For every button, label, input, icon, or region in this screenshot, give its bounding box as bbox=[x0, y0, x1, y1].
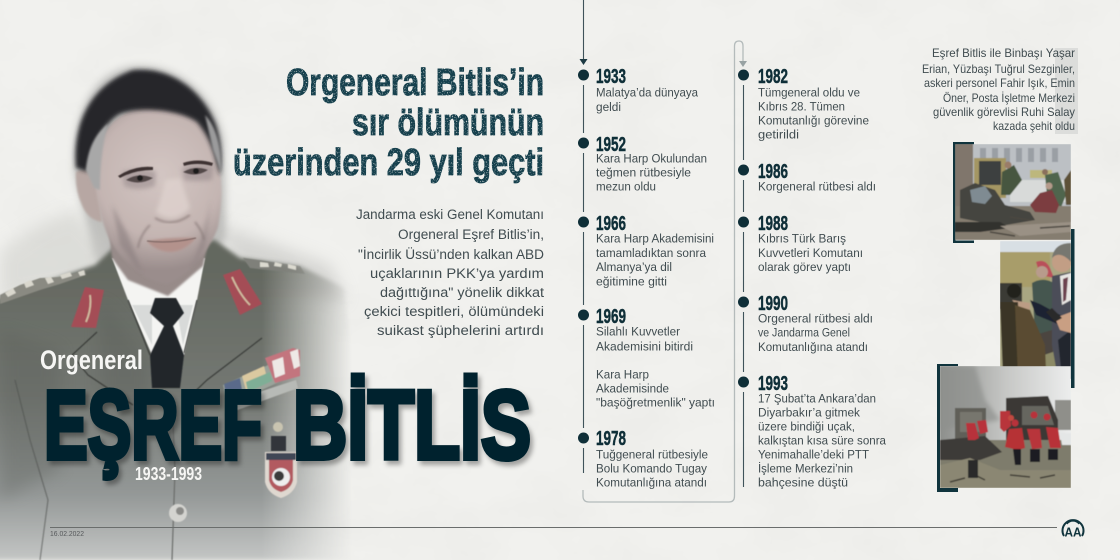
1988: 1988 bbox=[758, 213, 788, 235]
photo: rescue workers in red bbox=[940, 366, 1071, 488]
1966 bbox=[578, 213, 714, 288]
tie bbox=[150, 298, 184, 388]
uniform body bbox=[0, 240, 360, 560]
photo: crash debris bbox=[955, 144, 1071, 240]
1993 bbox=[738, 373, 886, 490]
icon: AA logo: AA bbox=[1064, 524, 1082, 540]
big name: EŞREF bbox=[44, 370, 262, 480]
face bbox=[100, 110, 222, 266]
arrow: connector head bbox=[739, 61, 747, 67]
1969: Kara Harp bbox=[596, 368, 649, 382]
1978: Bolu Komando Tugay bbox=[596, 462, 708, 476]
shirt bbox=[112, 258, 205, 355]
uniform button bbox=[169, 504, 187, 522]
name block bbox=[40, 345, 531, 484]
1982: 1982 bbox=[758, 66, 788, 88]
connector between timeline columns bbox=[583, 41, 743, 502]
title: sır ölümünün bbox=[352, 102, 544, 144]
caption: victims of the crash: güvenlik görevlisi Ruhi Salay bbox=[933, 105, 1075, 119]
1933 bbox=[578, 66, 698, 114]
intro paragraph: çekici tespitleri, ölümündeki bbox=[364, 304, 544, 319]
1990: ve Jandarma Genel bbox=[758, 326, 850, 340]
1969 bbox=[578, 306, 715, 410]
1988: olarak görev yaptı bbox=[758, 260, 851, 274]
main line and arrow bbox=[580, 0, 588, 473]
haze on left behind shoulder bbox=[0, 212, 96, 293]
1966: Kara Harp Akademisini bbox=[596, 232, 714, 246]
caption: victims of the crash: Eşref Bitlis ile Binbaşı Yaşar bbox=[932, 46, 1075, 60]
1990: Komutanlığına atandı bbox=[758, 340, 868, 354]
1993: bahçesine düştü bbox=[758, 476, 848, 490]
1990: Orgeneral rütbesi aldı bbox=[758, 312, 873, 326]
1990: 1990 bbox=[758, 293, 788, 315]
1969: Akademisinde bbox=[596, 382, 669, 396]
halo shadow around head bbox=[74, 66, 226, 290]
big name: BİTLİS bbox=[293, 370, 531, 480]
title: üzerinden 29 yıl geçti bbox=[233, 142, 544, 184]
title bbox=[233, 62, 544, 184]
portrait: general in uniform bbox=[0, 66, 360, 560]
caption: victims of the crash: Öner, Posta İşletme Merkezi bbox=[943, 91, 1075, 105]
caption: victims of the crash: askeri personel Fahir Işık, Emin bbox=[924, 76, 1075, 90]
intro paragraph: uçaklarının PKK’ya yardım bbox=[370, 266, 544, 281]
1966: tamamladıktan sonra bbox=[596, 246, 706, 260]
1969: 1969 bbox=[596, 306, 626, 328]
hair bbox=[75, 70, 221, 176]
1982: Komutanlığı görevine bbox=[758, 114, 869, 128]
1986: 1986 bbox=[758, 161, 788, 183]
caption: victims of the crash: Erian, Yüzbaşı Tuğrul Sezginler, bbox=[922, 62, 1075, 76]
1952: 1952 bbox=[596, 134, 626, 156]
1986: Korgeneral rütbesi aldı bbox=[758, 180, 876, 194]
1993: 17 Şubat’ta Ankara’dan bbox=[758, 392, 876, 406]
1993: İşleme Merkezi’nin bbox=[758, 462, 853, 476]
1993: kalkıştan kısa süre sonra bbox=[758, 434, 886, 448]
1982: Tümgeneral oldu ve bbox=[758, 86, 860, 100]
1952: mezun oldu bbox=[596, 180, 656, 194]
1978 bbox=[578, 428, 708, 490]
icon: AA logo bbox=[1062, 520, 1084, 540]
1933: geldi bbox=[596, 100, 621, 114]
footer rule bbox=[50, 527, 1057, 528]
intro paragraph: "İncirlik Üssü’nden kalkan ABD bbox=[358, 247, 544, 262]
life dates: 1933-1993 bbox=[135, 464, 202, 484]
ear bbox=[76, 170, 102, 222]
chest shading bbox=[0, 360, 139, 496]
1993: Diyarbakır’a gitmek bbox=[758, 406, 861, 420]
1978: Komutanlığına atandı bbox=[596, 476, 707, 490]
1993: Yenimahalle’deki PTT bbox=[758, 448, 869, 462]
1969: "başöğretmenlik" yaptı bbox=[596, 396, 715, 410]
medal ribbons bbox=[223, 348, 300, 412]
timeline: left column bbox=[578, 0, 715, 490]
big name bbox=[44, 370, 531, 480]
1988 bbox=[738, 213, 863, 274]
1988: Kıbrıs Türk Barış bbox=[758, 232, 846, 246]
1982: getirildi bbox=[758, 128, 799, 142]
title: Orgeneral Bitlis’in bbox=[286, 62, 544, 104]
1966: eğitimine gitti bbox=[596, 274, 667, 288]
intro paragraph: suikast şüphelerini artırdı bbox=[377, 323, 544, 338]
1966: Almanya’ya dil bbox=[596, 260, 672, 274]
1933: Malatya’da dünyaya bbox=[596, 86, 698, 100]
intro paragraph: Orgeneral Eşref Bitlis’in, bbox=[398, 227, 544, 242]
1993: üzere bindiği uçak, bbox=[758, 420, 855, 434]
photo: officials with coat bbox=[1000, 241, 1072, 379]
intro paragraph: dağıttığına" yönelik dikkat bbox=[380, 285, 544, 300]
timeline: right column bbox=[738, 66, 886, 490]
1966: 1966 bbox=[596, 213, 626, 235]
1982: Kıbrıs 28. Tümen bbox=[758, 100, 845, 114]
1933: 1933 bbox=[596, 66, 626, 88]
1978: Tuğgeneral rütbesiyle bbox=[596, 448, 708, 462]
intro paragraph bbox=[356, 207, 544, 338]
lapels bbox=[15, 300, 262, 560]
caption: victims of the crash: kazada şehit oldu bbox=[993, 119, 1075, 133]
1952: teğmen rütbesiyle bbox=[596, 166, 691, 180]
1982 bbox=[738, 66, 869, 142]
1952: Kara Harp Okulundan bbox=[596, 152, 707, 166]
intro paragraph: Jandarma eski Genel Komutanı bbox=[356, 207, 544, 222]
red figures bbox=[966, 423, 979, 440]
photo frames bbox=[937, 142, 1074, 492]
1969: Akademisini bitirdi bbox=[596, 340, 693, 354]
1988: Kuvvetleri Komutanı bbox=[758, 246, 863, 260]
rank label: Orgeneral bbox=[40, 345, 143, 375]
facial features bbox=[112, 160, 214, 273]
1993: 1993 bbox=[758, 373, 788, 395]
red collar tabs bbox=[71, 269, 262, 328]
grey temple hair bbox=[86, 124, 108, 190]
neck bbox=[109, 238, 208, 297]
epaulettes bbox=[0, 258, 305, 304]
1978: 1978 bbox=[596, 428, 626, 450]
1990 bbox=[738, 293, 873, 354]
1969: Silahlı Kuvvetler bbox=[596, 324, 680, 338]
caption: victims of the crash bbox=[922, 46, 1078, 134]
1952 bbox=[578, 134, 707, 194]
column line bbox=[742, 85, 744, 487]
1986 bbox=[738, 161, 876, 194]
date: 16.02.2022 bbox=[50, 529, 84, 538]
shirt shadow bbox=[132, 305, 193, 345]
pin and shield badge bbox=[169, 422, 297, 522]
